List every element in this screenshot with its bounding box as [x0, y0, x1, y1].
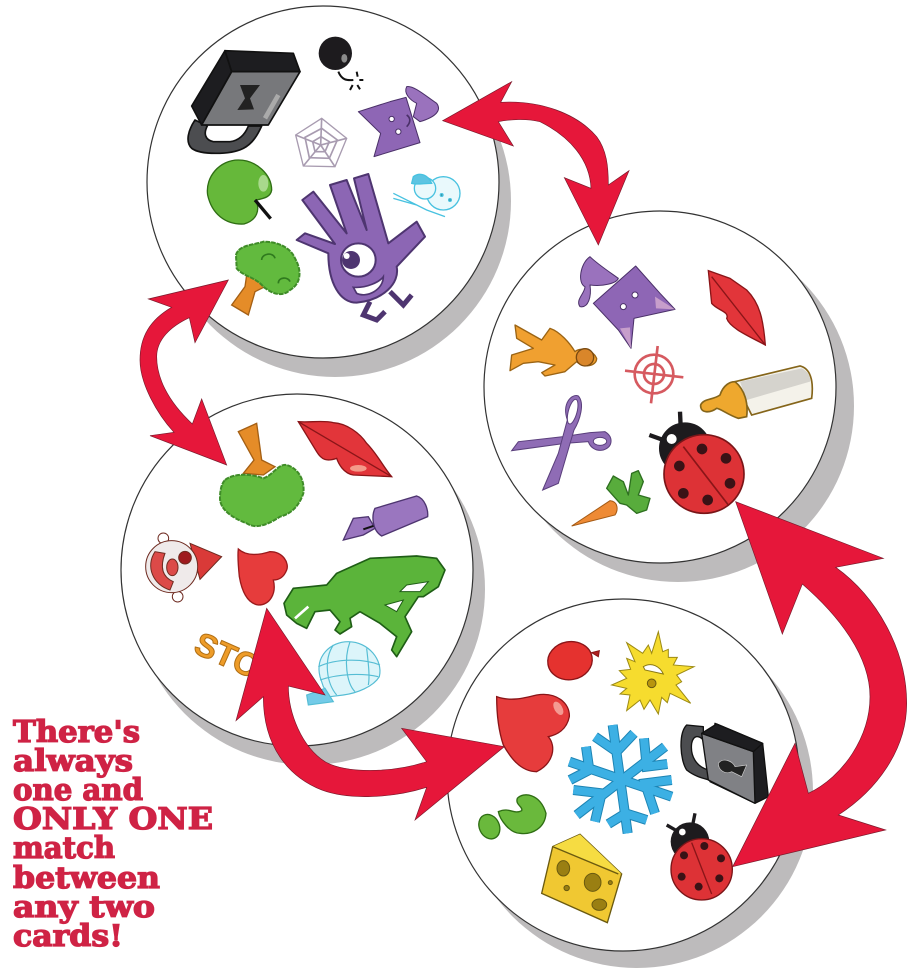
icon: purple cat: [358, 87, 439, 157]
icon: red balloon: [545, 638, 599, 683]
icon: big red heart: [497, 694, 569, 772]
text block: slogan: ONLY ONE: [13, 802, 213, 837]
icon: red lips 2: [298, 421, 392, 477]
card 2: [484, 211, 854, 582]
icon: cheese: [542, 834, 622, 923]
icon: green apple: [207, 160, 272, 224]
arrow: card 2 to card 4: [733, 502, 907, 867]
icon: purple cat 2: [579, 257, 675, 348]
card 4: [447, 599, 813, 968]
text block: slogan: There's: [13, 715, 140, 750]
text block: slogan: always: [13, 744, 133, 779]
card 1: [147, 6, 511, 377]
icon: sun: [612, 632, 694, 714]
icon: ladybug: [649, 412, 744, 513]
icon: carrot: [572, 471, 650, 526]
icon: bomb: [319, 37, 363, 90]
icon: pen nib: [343, 496, 428, 540]
icon: snowman: [393, 174, 460, 217]
icon: red heart small: [238, 549, 287, 605]
text block: slogan: cards!: [13, 919, 123, 954]
icon: red lips: [708, 271, 765, 345]
text block: slogan: one and: [13, 773, 143, 808]
icon: spider web: [296, 118, 347, 167]
icon: snowflake: [569, 725, 672, 833]
icon: orange man: [510, 325, 597, 376]
arrow: card 1 to card 3: [140, 280, 228, 465]
text block: slogan: any two: [13, 890, 155, 925]
icon: target: [625, 346, 683, 403]
icon: scissors: [512, 396, 611, 490]
icon: clown: [146, 533, 222, 602]
icon: igloo: [307, 642, 380, 705]
arrow: card 1 to card 2: [443, 82, 629, 245]
text block: slogan: between: [13, 861, 160, 896]
icon: green question mark: [475, 795, 546, 842]
icon: black padlock 2: [681, 723, 768, 803]
text block: slogan: [13, 715, 213, 954]
icon: baby bottle: [701, 366, 812, 418]
text block: slogan: match: [13, 831, 115, 866]
icon: stop sign text: STO: [189, 625, 266, 686]
icon: ladybug 2: [667, 813, 732, 900]
icon: green dinosaur: [284, 556, 445, 657]
arrow: card 3 to card 4: [236, 608, 504, 820]
icon: tree: [232, 242, 300, 315]
icon: purple hand creature: [297, 174, 425, 320]
card 3: [121, 394, 485, 765]
icon: black padlock: [188, 51, 300, 153]
icon: upside-down tree: [220, 423, 304, 526]
